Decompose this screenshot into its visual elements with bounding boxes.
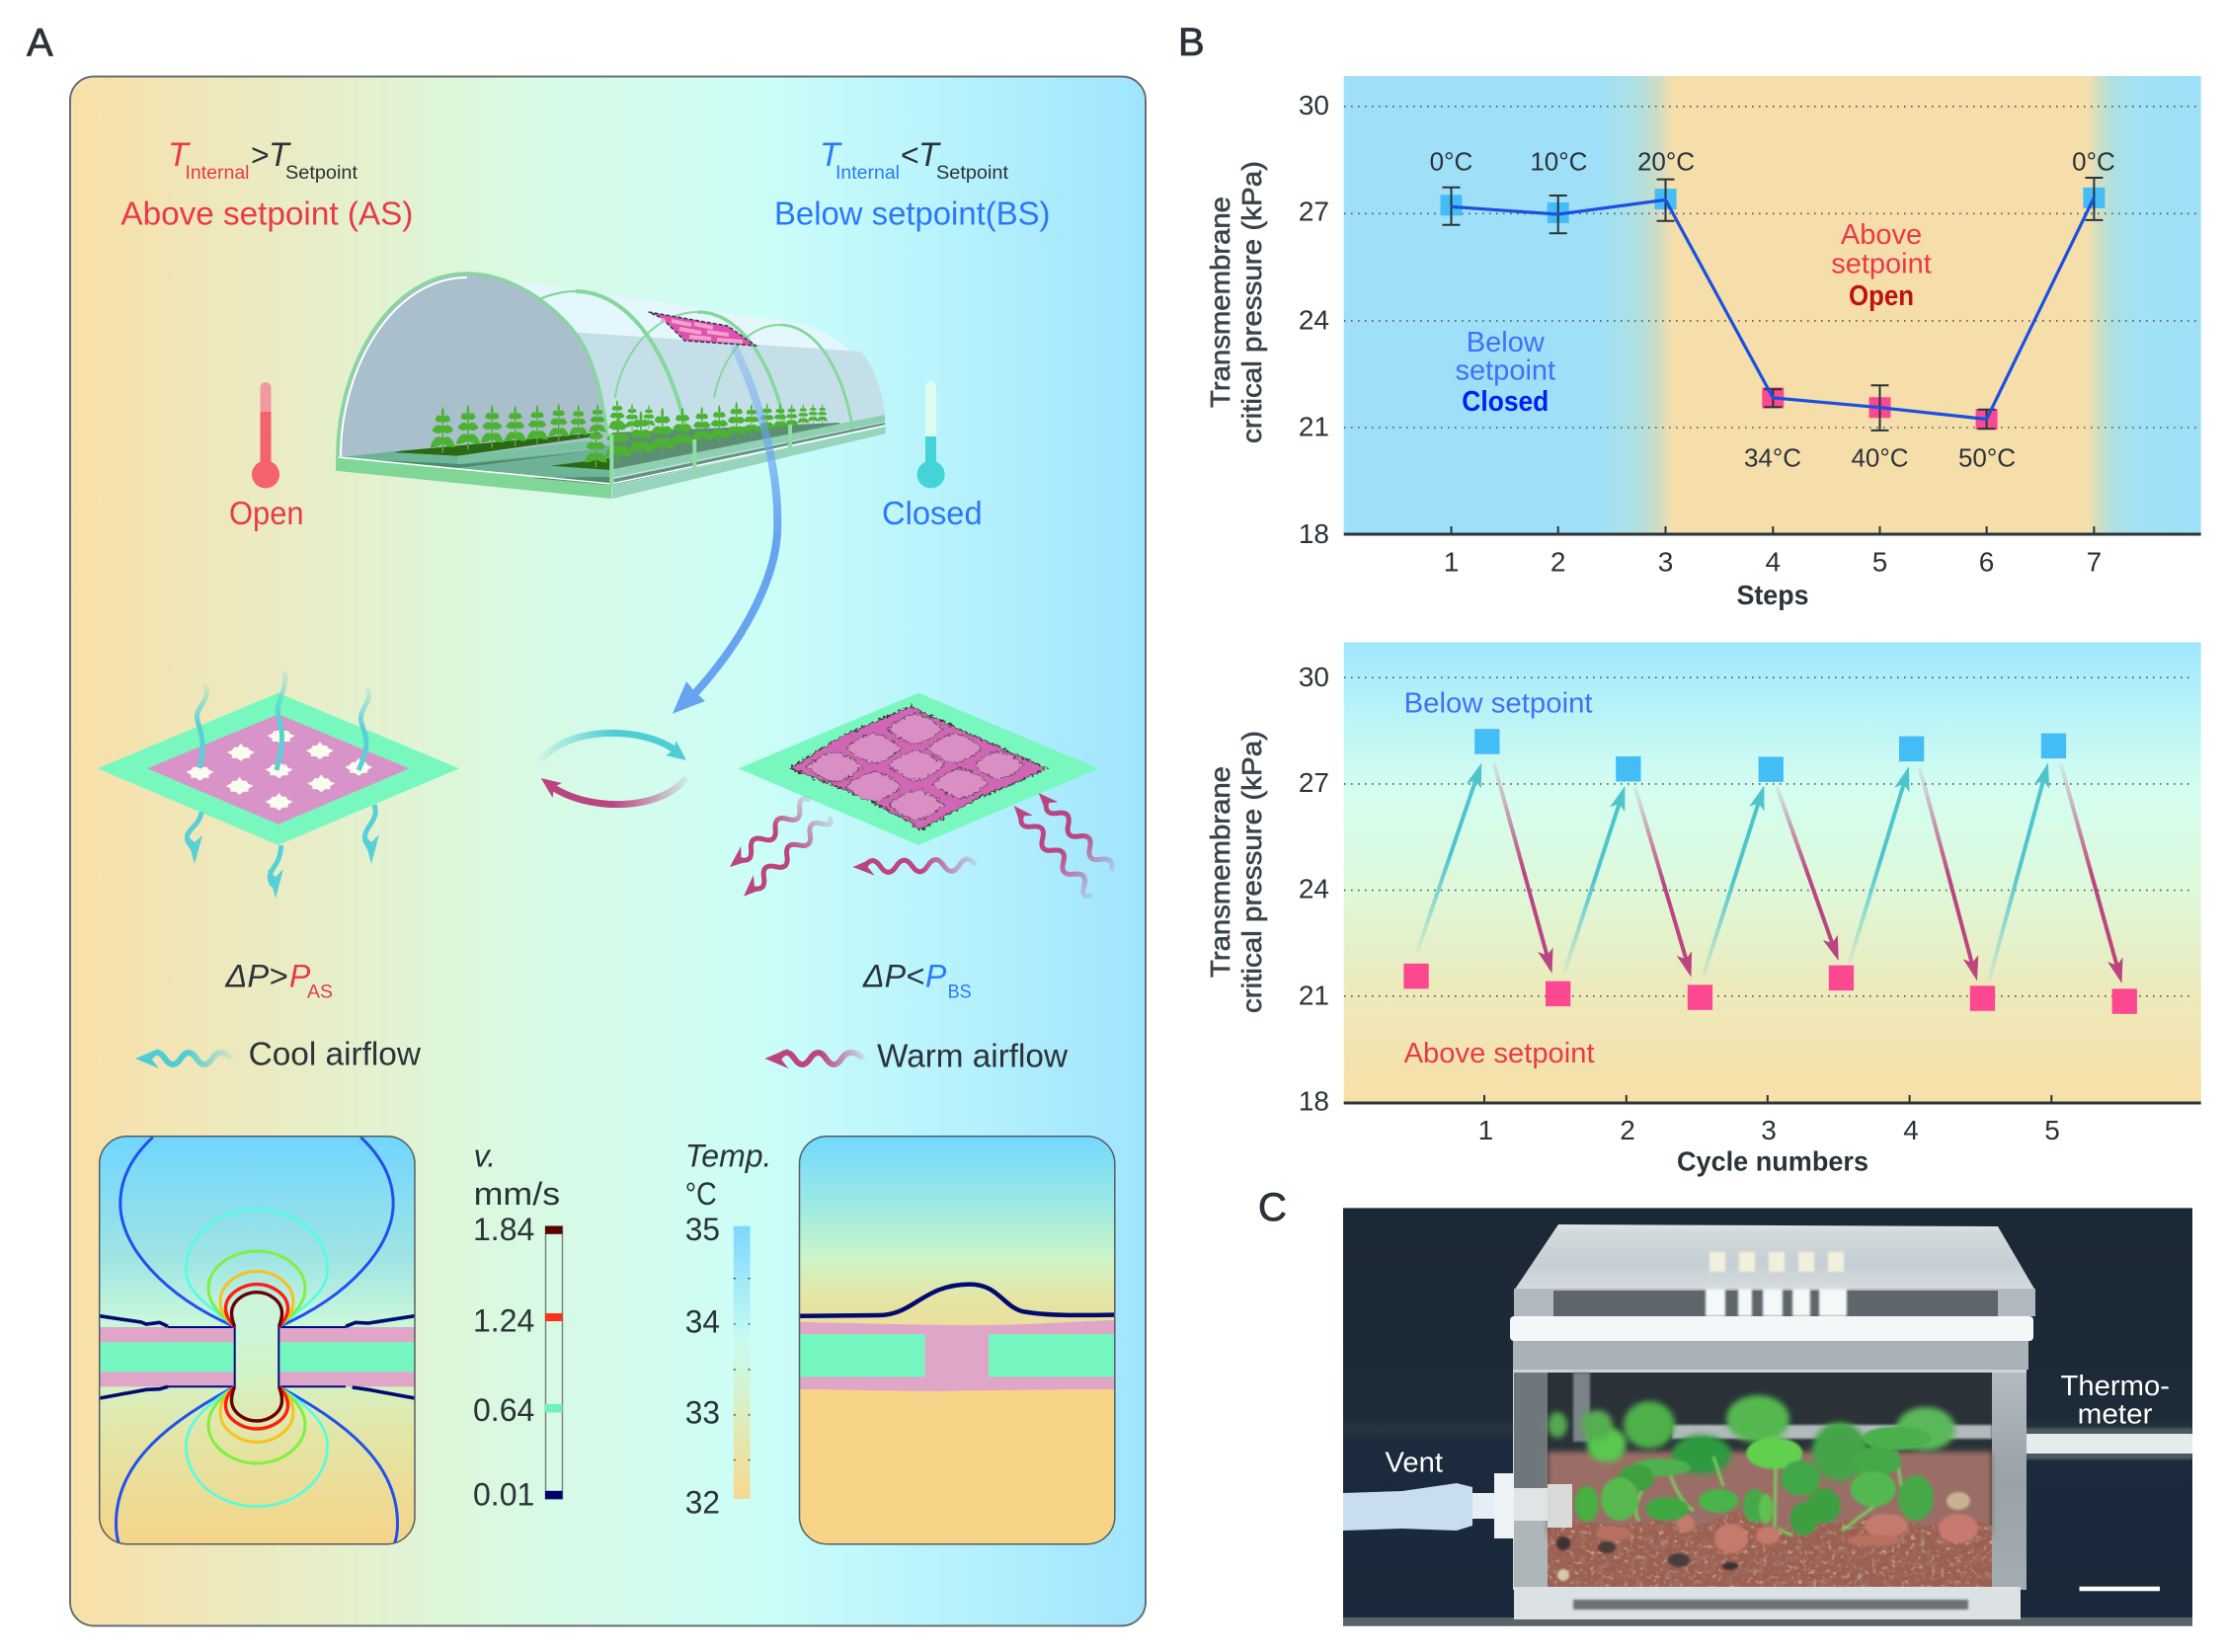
annotation: below setpoint: Below setpoint [1404, 687, 1593, 719]
greenhouse end wall [338, 274, 611, 485]
y axis tick labels [1299, 662, 1329, 1117]
x axis: 7 [2087, 546, 2102, 577]
x axis: 3 [1761, 1115, 1777, 1145]
membrane: open state with pores [98, 671, 459, 899]
pores [186, 727, 372, 811]
velocity colour scale: 1.84 [473, 1212, 534, 1247]
y axis tick labels: 27 [1299, 767, 1329, 798]
blue markers [1474, 729, 2066, 782]
formula: pressure above AS threshold: AS [307, 983, 333, 1003]
x axis: 4 [1903, 1115, 1919, 1145]
simulation: velocity contours through open pore [99, 1137, 416, 1544]
velocity colour scale: 0.01 [473, 1477, 534, 1513]
warm arrow 1 [724, 793, 816, 874]
heading: below setpoint condition: < [901, 137, 919, 173]
panel C: photo of greenhouse model box [1343, 1208, 2192, 1626]
formula: pressure below BS threshold: P [925, 958, 947, 993]
x axis [1344, 526, 2201, 577]
blurred background leaves [1548, 1395, 1955, 1481]
temperature labels: 34°C [1744, 443, 1801, 473]
panel label: A: A [27, 22, 53, 65]
warm arrow 5 [1008, 801, 1098, 901]
x axis: 1 [1478, 1115, 1493, 1145]
heading: above setpoint condition: T [269, 136, 291, 174]
velocity colour scale: 0.64 [473, 1392, 534, 1428]
warm airflow arrows around closed membrane [724, 788, 1117, 903]
temperature colour scale: 35 [685, 1212, 720, 1247]
temperature labels: 0°C [1430, 147, 1472, 177]
x axis: 5 [1872, 546, 1887, 577]
legend: cool airflow [135, 1035, 421, 1071]
heading: above setpoint condition: Setpoint [285, 163, 358, 184]
temperature labels: 10°C [1530, 147, 1587, 177]
label: Thermo-meter: Thermo- [2060, 1371, 2170, 1402]
cool airflow passing through pores [187, 671, 375, 887]
velocity colour scale: v. [474, 1139, 496, 1174]
isotherm [800, 1285, 1115, 1316]
annotation: above setpoint open: Open [1849, 280, 1914, 312]
membrane: closed state, swollen [739, 693, 1099, 845]
y axis title [1205, 161, 1267, 443]
box base [1514, 1587, 2021, 1619]
heading: above setpoint condition: > [251, 137, 270, 173]
greenhouse base [336, 425, 886, 499]
icon: cold thermometer [917, 381, 945, 488]
greenhouse floor [341, 444, 611, 484]
thermometer tube [2015, 1428, 2192, 1459]
simulation: temperature field over closed membrane [800, 1137, 1115, 1544]
heading: below setpoint condition: T [918, 136, 941, 174]
panel A: airflow mechanism [70, 77, 1146, 1625]
x axis title: Steps: Steps [1736, 580, 1809, 610]
lid [1510, 1224, 2035, 1341]
swollen membrane layers [800, 1320, 1115, 1391]
temperature labels: 50°C [1958, 443, 2016, 473]
scale bar [2080, 1587, 2160, 1591]
temperature colour scale: 34 [685, 1303, 720, 1339]
y axis tick labels [1299, 90, 1329, 549]
legend: warm airflow [764, 1038, 1068, 1074]
swollen membrane cells [807, 714, 1024, 820]
temperature colour scale: °C [685, 1176, 717, 1212]
membrane layers [99, 1327, 416, 1386]
y axis title: critical pressure (kPa) [1236, 161, 1267, 443]
velocity colour scale: 1.24 [473, 1303, 534, 1339]
heading: above setpoint condition [120, 136, 413, 233]
formula: pressure below BS threshold [862, 958, 972, 1003]
temperature labels: 40°C [1851, 443, 1909, 473]
sharp foreground leaves [1575, 1427, 1934, 1535]
falling cycle arrows [1494, 762, 2129, 985]
temperature colour scale: 33 [685, 1395, 720, 1431]
formula: pressure above AS threshold: P [289, 958, 311, 993]
velocity colour scale [473, 1139, 563, 1513]
temperature colour scale: 32 [685, 1485, 720, 1521]
annotation: below setpoint closed: Closed [1462, 386, 1549, 418]
temperature labels: 20°C [1637, 147, 1695, 177]
warm arrow 2 [738, 811, 834, 903]
pink markers [1762, 387, 1998, 430]
pink markers [1403, 964, 2137, 1014]
temperature labels [1430, 147, 2115, 473]
temperature labels: 0°C [2072, 147, 2115, 177]
legend: cool airflow: Cool airflow [249, 1035, 421, 1071]
greenhouse plants [431, 400, 828, 468]
x axis: 4 [1766, 546, 1781, 577]
legend: warm airflow: Warm airflow [877, 1038, 1068, 1074]
error bars [1442, 178, 2103, 431]
x axis: 1 [1444, 546, 1459, 577]
membrane patch on roof [649, 312, 755, 346]
heading: above setpoint condition: Above setpoint (AS) [120, 197, 413, 233]
box side walls [1514, 1373, 2026, 1590]
temperature colour scale: Temp. [685, 1139, 771, 1174]
y axis tick labels: 27 [1299, 197, 1329, 227]
y axis title: critical pressure (kPa) [1236, 731, 1267, 1013]
blue markers [1440, 188, 2105, 223]
arrow: greenhouse membrane to detail view [673, 346, 777, 714]
y axis tick labels: 21 [1299, 980, 1329, 1010]
velocity contours [100, 1138, 415, 1543]
y axis tick labels: 24 [1299, 304, 1329, 336]
annotation: above setpoint open: Above [1841, 219, 1922, 251]
x axis: 2 [1620, 1115, 1635, 1145]
warm arrow 3 [852, 856, 976, 876]
velocity colour scale: mm/s [474, 1176, 560, 1212]
greenhouse arches [467, 291, 854, 477]
formula: pressure above AS threshold [224, 958, 333, 1003]
chart: pressure vs steps [1205, 76, 2201, 610]
label: Thermo-meter: meter [2078, 1399, 2153, 1431]
box interior [1548, 1373, 1992, 1531]
y axis title [1205, 731, 1267, 1013]
icon: hot thermometer [252, 382, 279, 488]
formula: pressure above AS threshold: ΔP> [224, 958, 287, 993]
y axis tick labels: 21 [1299, 412, 1329, 442]
cycle arrows: reversible switching [541, 733, 686, 805]
x axis: 6 [1979, 546, 1994, 577]
y axis tick labels: 18 [1299, 1086, 1329, 1117]
x axis [1344, 1095, 2201, 1145]
y axis tick labels: 30 [1299, 90, 1329, 120]
y axis tick labels: 30 [1299, 662, 1329, 692]
heading: below setpoint condition: Below setpoint(BS) [774, 197, 1051, 233]
x axis: 3 [1658, 546, 1673, 577]
heading: below setpoint condition: Setpoint [936, 163, 1009, 184]
greenhouse planting beds [372, 415, 885, 485]
data line [1452, 197, 2094, 419]
annotation: below setpoint closed: Below [1467, 327, 1546, 358]
y axis title: Transmembrane [1205, 766, 1235, 978]
model box [1510, 1224, 2035, 1619]
heading: above setpoint condition: T [168, 136, 191, 174]
label: Vent: Vent [1385, 1448, 1443, 1479]
annotation: above setpoint open: setpoint [1831, 249, 1932, 280]
panel label: B: B [1178, 21, 1205, 64]
chart: pressure vs cycle numbers [1205, 642, 2201, 1177]
warm arrow 4 [1033, 788, 1117, 876]
annotation: below setpoint closed: setpoint [1456, 355, 1555, 387]
annotation: above setpoint open [1831, 219, 1932, 312]
label: Closed: Closed [882, 495, 983, 531]
temperature colour scale [685, 1139, 771, 1521]
illustration: greenhouse [336, 274, 886, 499]
label: Open: Open [229, 495, 304, 531]
x axis: 2 [1550, 546, 1565, 577]
vent tube [1343, 1473, 1572, 1538]
label: Thermo-meter [2061, 1375, 2169, 1424]
heading: below setpoint condition: Internal [835, 163, 900, 184]
rising cycle arrows [1417, 760, 2056, 982]
formula: pressure below BS threshold: BS [948, 983, 972, 1003]
annotation: above setpoint: Above setpoint [1404, 1038, 1595, 1069]
panel label: C: C [1258, 1186, 1287, 1229]
x axis title: Cycle numbers: Cycle numbers [1677, 1146, 1868, 1177]
y axis tick labels: 24 [1299, 873, 1329, 904]
soil [1548, 1492, 1992, 1587]
annotation: below setpoint closed [1456, 327, 1555, 418]
heading: above setpoint condition: Internal [186, 163, 249, 184]
x axis: 5 [2044, 1115, 2060, 1145]
formula: pressure below BS threshold: ΔP< [862, 958, 924, 993]
heading: below setpoint condition [774, 136, 1051, 233]
heading: below setpoint condition: T [820, 136, 842, 174]
y axis title: Transmembrane [1205, 197, 1235, 408]
y axis tick labels: 18 [1299, 518, 1329, 549]
